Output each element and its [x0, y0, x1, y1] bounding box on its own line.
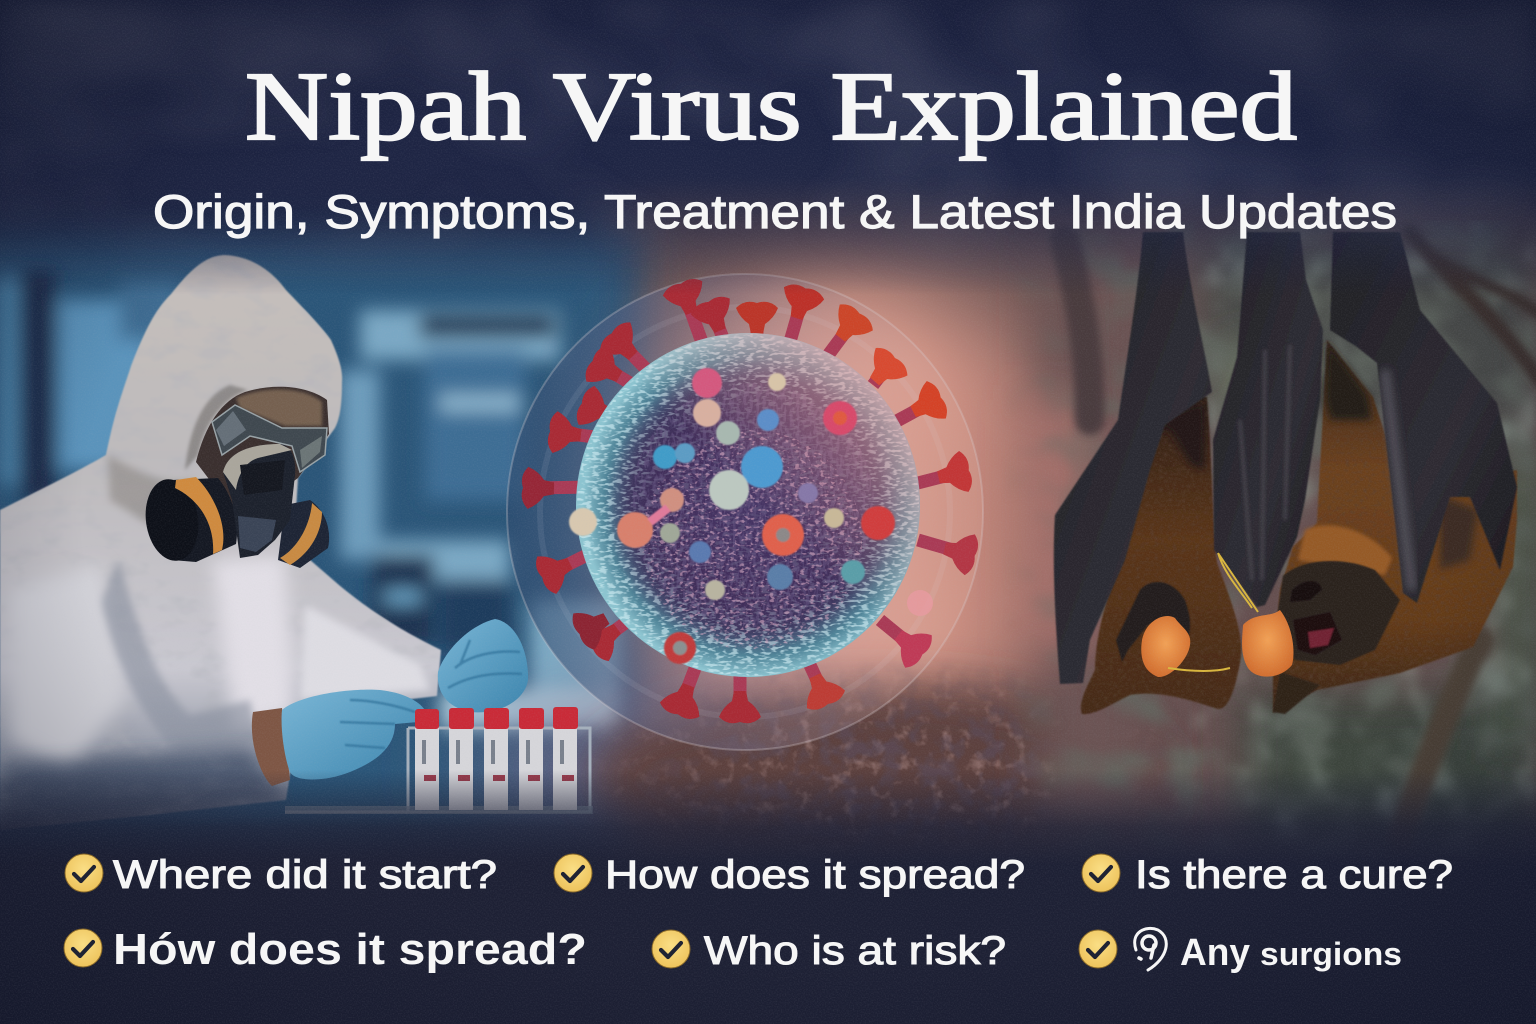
haze mottling in the title band: [16, 1, 1521, 212]
centre folded wing: [1213, 232, 1323, 607]
gold whisker fibres: [1168, 553, 1258, 671]
right bat fruit: [1242, 610, 1294, 677]
icon: ear-shaped glyph: [1135, 928, 1166, 970]
question: where did it start: Where did it start?: [113, 853, 497, 897]
test tube rack with five red capped tubes: [285, 707, 593, 814]
rubber glove cuff: [252, 708, 290, 786]
background: laboratory scene, blurred blue: [0, 230, 640, 850]
top fade band behind the title: [0, 0, 1536, 295]
spike proteins: [521, 275, 981, 723]
question: how does it spread, repeated: Hów does it spread?: [113, 925, 587, 974]
title: Nipah Virus Explained: [245, 53, 1297, 161]
fruit bats hanging upside down: [1054, 232, 1517, 714]
surface protein blobs: [569, 368, 895, 664]
virus particle: [521, 275, 981, 723]
subtitle: Origin, Symptoms, Treatment & Latest India Updates: [153, 185, 1397, 238]
blue gloved right hand holding up: [438, 619, 528, 712]
question: any surgions: surgions: [1260, 936, 1402, 972]
scientist in protective suit: [0, 255, 593, 830]
textured spherical surface: [576, 333, 920, 677]
right bat body fur: [1273, 340, 1517, 713]
left bat folded wing: [1054, 232, 1212, 684]
protective suit and hood: [0, 255, 441, 830]
blue gloved left hand at test tubes: [282, 690, 426, 780]
left bat body fur: [1081, 397, 1241, 714]
background: blurred crowd texture at bottom centre: [577, 656, 1049, 826]
respirator mask with orange-banded filter cartridges: [141, 444, 329, 568]
right bat head and open mouth: [1273, 561, 1400, 714]
question: any surgions: Any: [1180, 932, 1250, 974]
background: blurred forest on the right: [1000, 220, 1536, 860]
bottom navy panel: [0, 864, 1536, 1024]
left bat fruit: [1141, 616, 1190, 677]
question: who is at risk: Who is at risk?: [704, 929, 1006, 973]
face opening with goggles: [196, 387, 329, 520]
question: how does it spread: How does it spread?: [605, 853, 1025, 897]
glass bubble around the virus: [507, 274, 983, 750]
bottom fade band behind the questions: [0, 770, 1536, 865]
question: is there a cure: Is there a cure?: [1135, 853, 1453, 897]
right bat folded wing: [1330, 232, 1517, 603]
left bat snout: [1116, 582, 1190, 662]
background: pink and orange haze behind the virus: [470, 270, 1080, 820]
question: any surgions: [1079, 928, 1402, 974]
